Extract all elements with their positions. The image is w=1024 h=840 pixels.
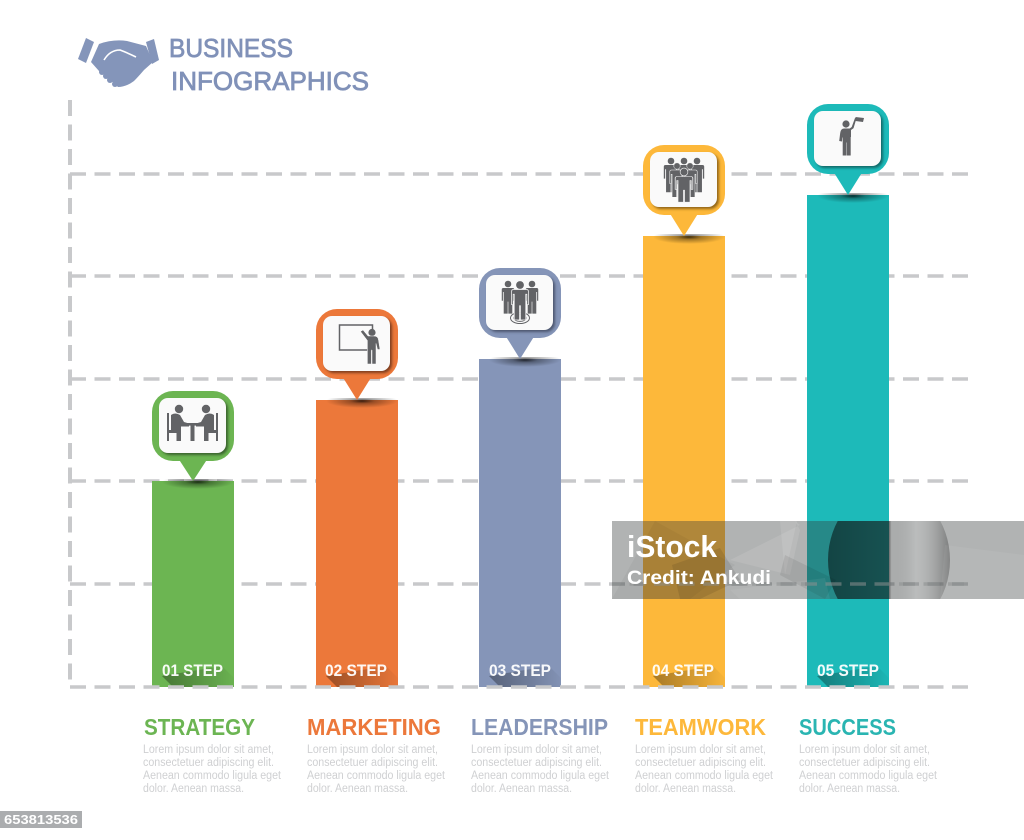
label: strategy (143, 714, 282, 795)
icon: handshake (78, 38, 159, 87)
bar 2 shadows (326, 394, 398, 687)
bar 5 step label: 05 STEP (817, 661, 879, 680)
pin 4 (643, 145, 725, 236)
label: leadership: Lorem ipsum dolor sit amet, (471, 744, 602, 756)
label: teamwork: TEAMWORK (635, 714, 766, 740)
step 3 column (479, 268, 561, 687)
bar 5 (807, 195, 889, 687)
label: strategy: Aenean commodo ligula eget (143, 770, 282, 782)
step 2 column (316, 309, 398, 687)
watermark dashes (612, 582, 972, 586)
icon: leader on target with team (502, 281, 538, 324)
pin 2 (316, 309, 398, 400)
label: teamwork: Aenean commodo ligula eget (635, 770, 774, 782)
label: strategy: Lorem ipsum dolor sit amet, (143, 744, 274, 756)
bar 3 (479, 359, 561, 687)
watermark text (627, 529, 771, 589)
label: success: dolor. Aenean massa. (799, 783, 900, 795)
label: marketing: consectetuer adipiscing elit. (307, 757, 438, 769)
bar 3 step label: 03 STEP (489, 661, 551, 680)
bar 2 (316, 400, 398, 687)
step 4 column (643, 145, 725, 687)
labels row (143, 714, 938, 795)
icon: two people at table (167, 405, 218, 441)
watermark text: iStock (627, 529, 718, 564)
label: success: consectetuer adipiscing elit. (799, 757, 930, 769)
label: strategy: consectetuer adipiscing elit. (143, 757, 274, 769)
bar 4 shadows (653, 230, 725, 687)
bar 4 (643, 236, 725, 687)
pin 3 (479, 268, 561, 359)
label: teamwork: consectetuer adipiscing elit. (635, 757, 766, 769)
label: success: Aenean commodo ligula eget (799, 770, 938, 782)
label: strategy: dolor. Aenean massa. (143, 783, 244, 795)
label: teamwork: dolor. Aenean massa. (635, 783, 736, 795)
label: strategy: STRATEGY (144, 714, 255, 740)
pin 5 (807, 104, 889, 195)
bar 3 shadows (489, 353, 561, 687)
bar 1 shadows (162, 475, 234, 687)
label: success: Lorem ipsum dolor sit amet, (799, 744, 930, 756)
bar 1 (152, 481, 234, 687)
watermark shapes (672, 521, 950, 599)
image id tag (0, 811, 82, 828)
step 5 column (807, 104, 889, 687)
pin 1 (152, 391, 234, 481)
label: marketing: MARKETING (307, 714, 441, 740)
label: leadership: dolor. Aenean massa. (471, 783, 572, 795)
label: teamwork: Lorem ipsum dolor sit amet, (635, 744, 766, 756)
label: leadership: Aenean commodo ligula eget (471, 770, 610, 782)
bar 5 shadows (817, 189, 889, 687)
watermark band (612, 521, 1024, 599)
title text (169, 33, 369, 96)
title text: INFOGRAPHICS (171, 66, 369, 96)
step 1 column (152, 391, 234, 687)
bar 4 step label: 04 STEP (652, 661, 714, 680)
label: success (799, 714, 938, 795)
label: leadership (471, 714, 610, 795)
label: success: SUCCESS (799, 714, 896, 740)
icon: presenter at board (340, 325, 380, 364)
label: marketing: Aenean commodo ligula eget (307, 770, 446, 782)
icon: person with flag (839, 117, 864, 156)
title text: BUSINESS (169, 33, 293, 63)
label: marketing: dolor. Aenean massa. (307, 783, 408, 795)
label: marketing: Lorem ipsum dolor sit amet, (307, 744, 438, 756)
icon: team group (664, 158, 704, 202)
title (78, 33, 369, 96)
label: teamwork (635, 714, 774, 795)
watermark text: Credit: Ankudi (627, 568, 771, 589)
image id tag: 653813536 (4, 813, 78, 827)
chart grid (70, 100, 972, 687)
label: marketing (307, 714, 446, 795)
bar 2 step label: 02 STEP (325, 661, 387, 680)
bar 1 step label: 01 STEP (162, 661, 223, 680)
baseline axis (70, 685, 972, 689)
label: leadership: LEADERSHIP (471, 714, 608, 740)
label: leadership: consectetuer adipiscing elit. (471, 757, 602, 769)
